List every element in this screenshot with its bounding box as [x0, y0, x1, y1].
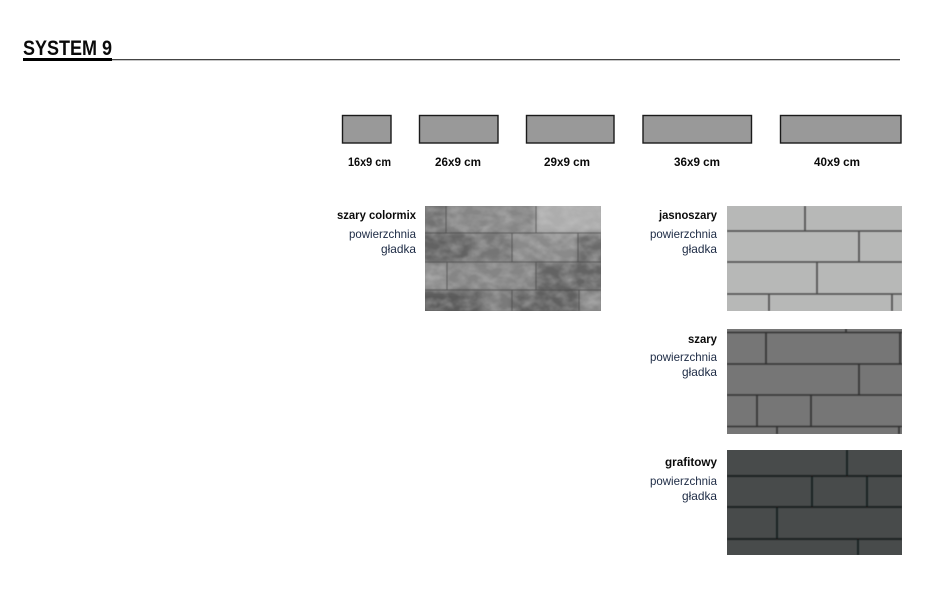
swatch: szary colormix paving [425, 206, 601, 311]
label: szary colormix: szary colormix [337, 208, 416, 222]
label: jasnoszary: jasnoszary [658, 208, 717, 222]
label: grafitowy: powierzchnia [650, 474, 717, 488]
brick 16x9 cm: 16x9 cm [348, 155, 391, 169]
label: grafitowy [650, 455, 717, 503]
label: szary colormix: gładka [381, 242, 416, 256]
brick 40x9 cm: 40x9 cm [814, 155, 860, 169]
brick 36x9 cm [643, 116, 752, 169]
label: szary: szary [688, 332, 717, 346]
label: szary colormix [337, 208, 416, 256]
label: grafitowy: gładka [682, 489, 717, 503]
label: szary: gładka [682, 365, 717, 379]
label: jasnoszary: powierzchnia [650, 227, 717, 241]
label: jasnoszary: gładka [682, 242, 717, 256]
label: grafitowy: grafitowy [665, 455, 717, 469]
size diagrams row [342, 116, 901, 169]
swatch: jasnoszary paving [727, 206, 902, 311]
title [23, 37, 900, 61]
brick 40x9 cm [780, 116, 901, 169]
brick 26x9 cm: 26x9 cm [435, 155, 481, 169]
brick 29x9 cm [526, 116, 614, 169]
brick 36x9 cm: 36x9 cm [674, 155, 720, 169]
label: szary: powierzchnia [650, 350, 717, 364]
brick 16x9 cm [342, 116, 391, 169]
label: jasnoszary [650, 208, 717, 256]
brick 29x9 cm: 29x9 cm [544, 155, 590, 169]
swatch: szary paving [727, 329, 902, 434]
brick 26x9 cm [420, 116, 498, 169]
label: szary [650, 332, 717, 379]
label: szary colormix: powierzchnia [349, 227, 416, 241]
title: SYSTEM 9 [23, 37, 112, 60]
swatch: grafitowy paving [727, 450, 902, 555]
